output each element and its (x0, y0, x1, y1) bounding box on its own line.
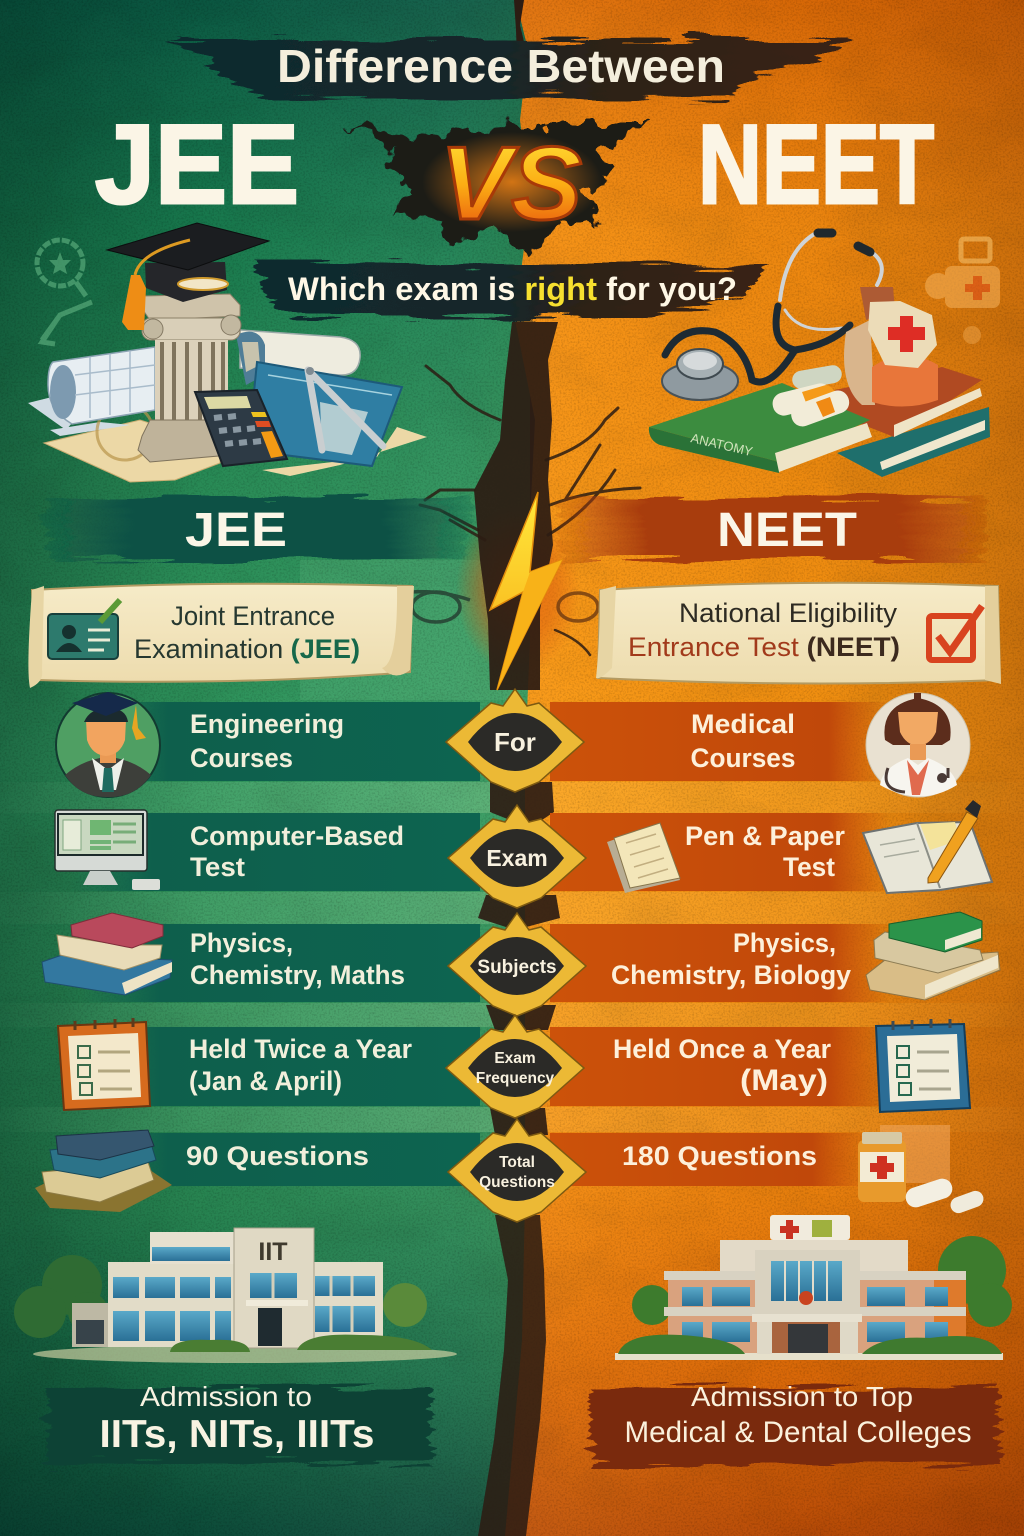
label: Engineering Courses: Courses (190, 743, 293, 773)
central crack (420, 0, 640, 1536)
NEET definition text: Entrance Test (NEET) (628, 632, 900, 662)
icon: books right (866, 912, 1000, 1000)
ground (615, 1353, 1003, 1360)
illustration: medical (649, 233, 990, 477)
scroll: JEE definition (28, 584, 414, 688)
row: Subjects (42, 912, 1000, 1016)
label: Held Once a Year: Held Once a Year (613, 1034, 831, 1064)
row: Total Questions (35, 1119, 986, 1222)
label: Held Twice a Year: Held Twice a Year (189, 1034, 412, 1064)
illustration: IIT building (14, 1228, 457, 1363)
rolled blueprint right (236, 330, 360, 385)
badge: For (446, 689, 584, 792)
badge: Exam Frequency: Frequency (476, 1070, 555, 1087)
scroll: NEET definition (596, 583, 1001, 684)
label: Physics, Chemistry, Biology: Chemistry, Biology (611, 960, 851, 990)
label: 90 Questions: 90 Questions (186, 1141, 369, 1171)
label: Computer-Based Test: Computer-Based (190, 821, 404, 851)
heading: NEET: NEET (698, 102, 934, 227)
icon: checkbox (929, 606, 982, 660)
question text: Which exam is right for you? (288, 271, 737, 307)
badge: For: For (494, 727, 536, 757)
medical bag (844, 287, 938, 407)
trees (14, 1255, 427, 1338)
title text: Difference Between (277, 40, 725, 92)
label: Physics, Chemistry, Maths: Chemistry, Maths (190, 960, 405, 990)
heading: JEE: JEE (95, 102, 299, 227)
JEE admission text: Admission to (140, 1381, 312, 1412)
label: Physics, Chemistry, Biology: Physics, (733, 928, 836, 958)
JEE definition text (134, 601, 360, 664)
icon: graduation cap (107, 223, 269, 330)
icon: computer (55, 810, 160, 890)
icon: open book and pencil (863, 800, 992, 893)
label: Pen & Paper Test: Pen & Paper (685, 821, 845, 851)
papers (28, 395, 427, 482)
badge: Subjects: Subjects (477, 957, 557, 978)
label: Held Once a Year (613, 1034, 831, 1097)
badge: Exam (448, 805, 586, 908)
label: Held Once a Year: (May) (740, 1064, 828, 1097)
row bands (70, 702, 890, 1186)
icon: medicine jar and pills (858, 1125, 986, 1215)
shrubs (618, 1335, 1002, 1354)
icon: engineering student (56, 692, 160, 797)
green anatomy book (649, 383, 872, 473)
NEET definition text: National Eligibility (679, 598, 898, 628)
VS badge (345, 124, 650, 258)
blueprint sheet (250, 362, 402, 466)
stethoscope bell (662, 349, 738, 400)
hospital sign (770, 1215, 850, 1240)
ground (33, 1345, 457, 1363)
VS text: VS (440, 126, 582, 242)
NEET definition text (628, 598, 900, 662)
icon: faint medical kit (925, 239, 1000, 344)
badge: Total Questions: Questions (479, 1174, 555, 1191)
label: Computer-Based Test: Test (190, 852, 245, 882)
badge: Exam Frequency: Exam (494, 1050, 536, 1067)
section header: JEE (45, 497, 470, 560)
label: Engineering Courses: Engineering (190, 709, 344, 739)
banner: NEET admission (590, 1381, 1000, 1464)
label: Pen & Paper Test: Test (783, 852, 835, 882)
label: Physics, Chemistry, Biology (611, 928, 851, 990)
badge: Total Questions (448, 1119, 586, 1222)
question banner (255, 262, 770, 318)
row: Exam (55, 800, 992, 908)
JEE admission text (100, 1381, 374, 1456)
JEE definition text: Examination (JEE) (134, 634, 360, 664)
icon: faint gear and compass (37, 240, 92, 344)
rolled blueprint left (48, 347, 155, 424)
IIT sign: IIT (258, 1238, 288, 1266)
NEET admission text (624, 1381, 972, 1449)
illustration: medical college (615, 1215, 1012, 1360)
NEET admission text: Admission to Top (691, 1381, 913, 1412)
label: Medical Courses: Medical (691, 709, 795, 739)
icon: clipboard left (58, 1018, 150, 1110)
calculator (195, 390, 287, 466)
icon: doctor (866, 693, 970, 797)
icon: ID card (48, 600, 120, 659)
books stack (835, 367, 990, 477)
label: Held Twice a Year: (Jan & April) (189, 1066, 342, 1096)
drafting compass (306, 367, 383, 450)
JEE definition text: Joint Entrance (171, 601, 335, 631)
row: Exam Frequency (58, 1015, 970, 1118)
JEE label: JEE (185, 504, 287, 557)
shrubs (170, 1335, 432, 1352)
lightning bolt (490, 492, 562, 690)
green anatomy book: ANATOMY (689, 430, 754, 459)
label: 180 Questions: 180 Questions (622, 1141, 817, 1171)
NEET label: NEET (717, 504, 857, 557)
label: Computer-Based Test (190, 821, 404, 882)
label: Engineering Courses (190, 709, 344, 773)
illustration: engineering (28, 223, 427, 482)
badge: Subjects (448, 913, 586, 1016)
badge: Total Questions: Total (499, 1154, 535, 1171)
JEE admission text: IITs, NITs, IIITs (100, 1413, 374, 1456)
row: For (56, 689, 970, 797)
trees (632, 1236, 1012, 1327)
label: Medical Courses: Courses (690, 743, 796, 773)
icon: book stack (35, 1130, 172, 1212)
banner: JEE admission (45, 1381, 432, 1464)
NEET admission text: Medical & Dental Colleges (624, 1416, 972, 1449)
label: Pen & Paper Test (685, 821, 845, 882)
section header: NEET (560, 497, 985, 560)
label: Held Twice a Year (189, 1034, 412, 1096)
capsules (770, 364, 852, 430)
scroll connectors (412, 592, 598, 622)
badge: Exam: Exam (486, 845, 548, 871)
label: Physics, Chemistry, Maths (190, 928, 405, 990)
icon: paper notes (607, 823, 680, 893)
stethoscope (665, 233, 882, 382)
label: Physics, Chemistry, Maths: Physics, (190, 928, 293, 958)
icon: clipboard right (876, 1019, 970, 1112)
badge: Exam Frequency (446, 1015, 584, 1118)
icon: books left (42, 913, 172, 995)
column (138, 294, 241, 462)
label: Medical Courses (690, 709, 796, 773)
title banner (170, 40, 850, 100)
